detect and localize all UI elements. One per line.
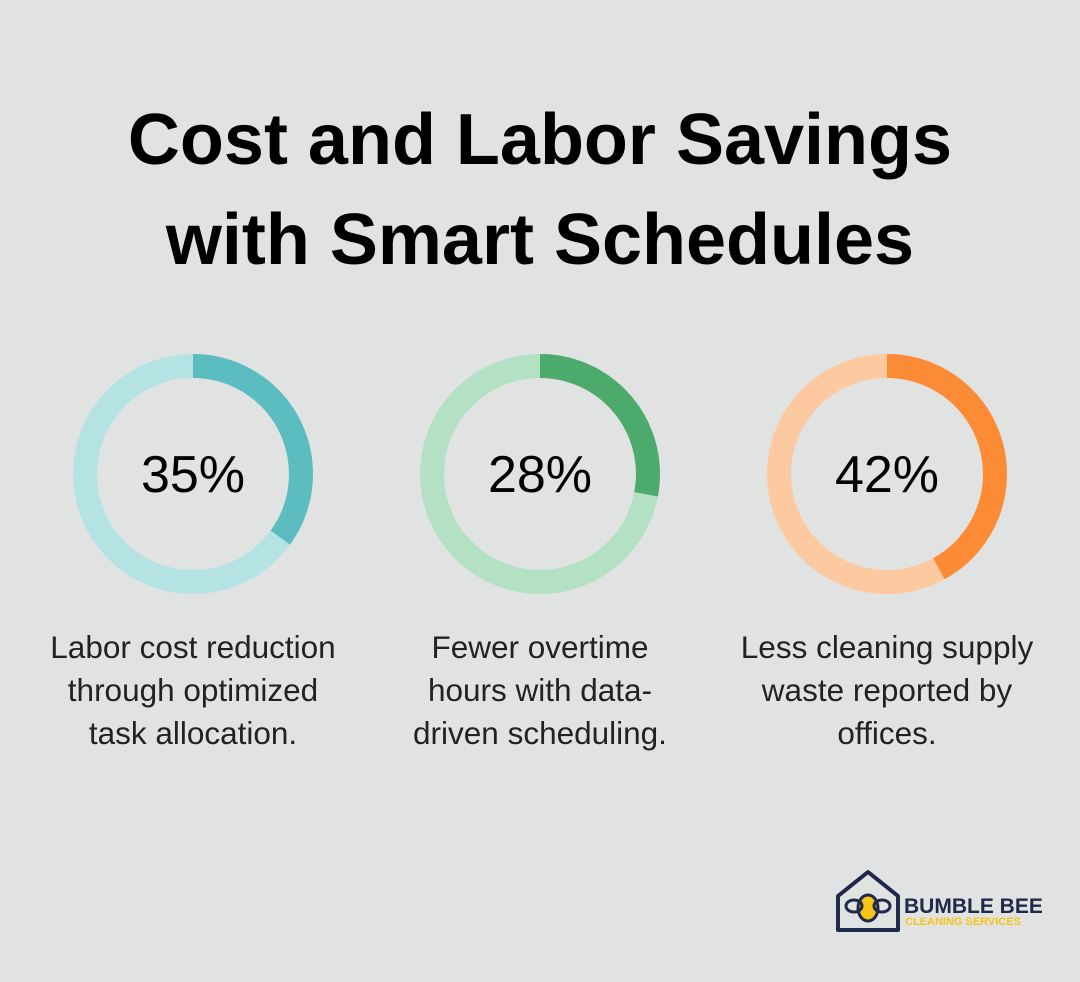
label 1: Labor cost reduction	[50, 629, 336, 665]
label 2	[413, 629, 667, 751]
label 3: Less cleaning supply	[741, 629, 1033, 665]
logo: CLEANING SERVICES	[905, 916, 1021, 928]
label 1: through optimized	[68, 672, 318, 708]
donut: 42%	[767, 354, 1007, 594]
donut: 35%	[73, 354, 313, 594]
label 3: offices.	[837, 715, 937, 751]
label 2: driven scheduling.	[413, 715, 667, 751]
donut: 28%	[420, 354, 660, 594]
label 3: waste reported by	[762, 672, 1012, 708]
label 1: task allocation.	[89, 715, 297, 751]
label 2: hours with data-	[428, 672, 652, 708]
title	[128, 100, 952, 280]
logo: BUMBLE BEE	[904, 895, 1042, 918]
logo	[836, 870, 1042, 932]
donut: 35%: 35%	[141, 446, 245, 504]
title: with Smart Schedules	[166, 200, 914, 280]
donut: 28%: 28%	[488, 446, 592, 504]
title: Cost and Labor Savings	[128, 100, 952, 180]
label 3	[741, 629, 1034, 751]
donut: 42%: 42%	[835, 446, 939, 504]
label 1	[50, 629, 336, 751]
label 2: Fewer overtime	[431, 629, 649, 665]
